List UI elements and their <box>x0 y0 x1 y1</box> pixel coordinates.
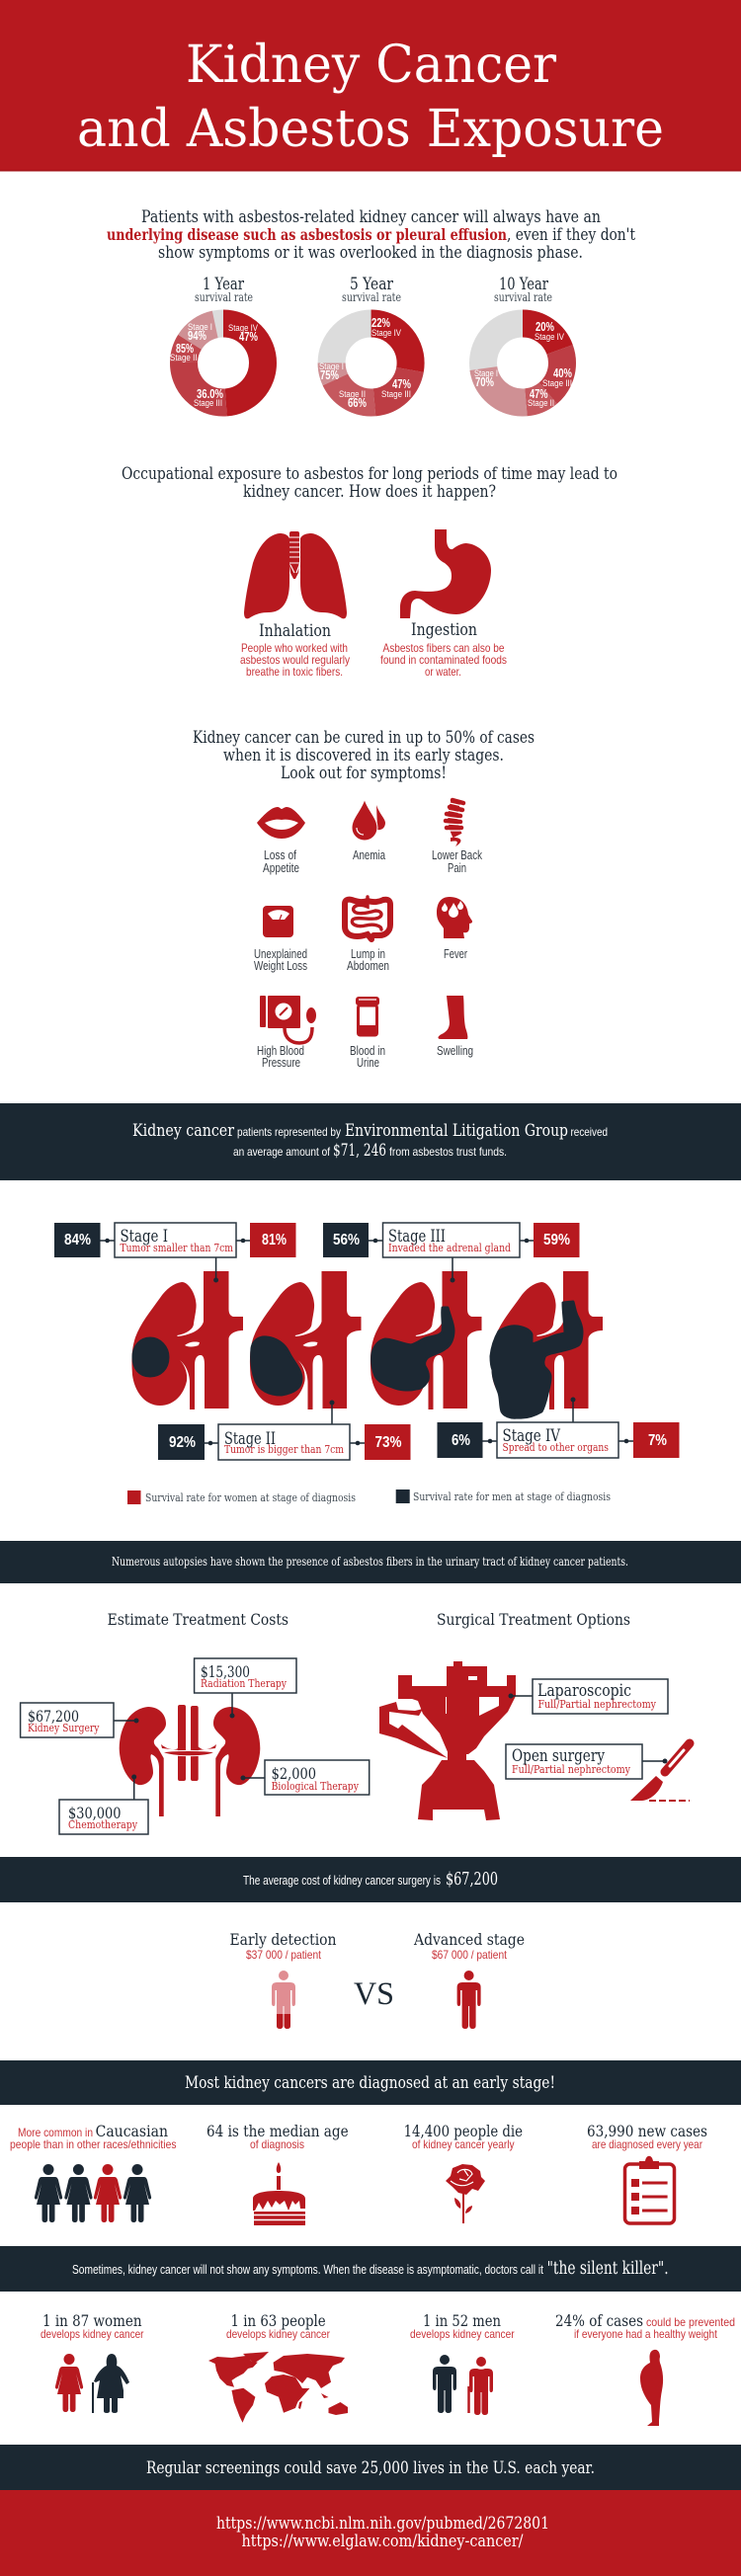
donut chart: 10 year survival: survival rate <box>494 290 552 304</box>
symptom labels: Lower Back <box>432 848 483 862</box>
donut chart: 10 year survival <box>474 275 572 409</box>
icon: swollen leg <box>438 996 467 1039</box>
donut chart: 1 year survival: 47% <box>239 330 258 344</box>
text block: inhalation <box>240 621 350 679</box>
callout: stage I: 81% <box>262 1232 287 1248</box>
callout: stage III: Invaded the adrenal gland <box>388 1242 511 1254</box>
text block: ingestion <box>380 620 507 679</box>
callout: stage II: 92% <box>169 1434 196 1451</box>
callout: open surgery: Open surgery <box>512 1746 605 1766</box>
stat: median age <box>206 2122 349 2225</box>
symptom labels: Anemia <box>353 848 385 862</box>
donut chart: 1 year survival: 36.0% <box>197 387 223 401</box>
icon: four women <box>35 2164 151 2222</box>
symptom labels: Pressure <box>262 1056 300 1070</box>
donut chart: 5 year survival: Stage III <box>381 389 411 400</box>
callout: stage II: 73% <box>375 1434 401 1451</box>
callout: biological therapy cost: Biological Therapy <box>272 1780 360 1793</box>
band: silent killer: "the silent killer". <box>547 2259 669 2279</box>
symptom labels: Unexplained <box>254 947 307 961</box>
intro text: show symptoms or it was overlooked in the diagnosis phase. <box>158 243 583 262</box>
donut chart: 5 year survival: survival rate <box>342 290 401 304</box>
icon: rose <box>446 2164 485 2223</box>
heading: symptoms: when it is discovered in its early stages. <box>223 746 504 765</box>
stat: new cases <box>587 2122 707 2223</box>
callout: biological therapy cost: $2,000 <box>272 1764 316 1783</box>
callout: radiation therapy cost: Radiation Therapy <box>201 1677 288 1690</box>
band: autopsies <box>0 1541 741 1583</box>
band: litigation group average: from asbestos trust funds. <box>389 1145 507 1159</box>
icon: birthday cake <box>253 2162 305 2225</box>
footer: sources: https://www.ncbi.nlm.nih.gov/pubmed/2672801 <box>216 2514 549 2533</box>
icon: kidneys and vessels <box>120 1705 260 1816</box>
band: regular screenings: Regular screenings could save 25,000 lives in the U.S. each year. <box>146 2458 595 2477</box>
donut chart: 5 year survival: 5 Year <box>350 275 394 294</box>
band: average surgery cost: $67,200 <box>446 1869 498 1890</box>
callout: stage III: 59% <box>543 1232 570 1248</box>
stat: median age: of diagnosis <box>250 2137 304 2151</box>
donut chart: 10 year survival: 47% <box>530 387 547 401</box>
text block: inhalation: breathe in toxic fibers. <box>246 665 343 679</box>
stat: 1 in 63 people: develops kidney cancer <box>226 2327 330 2341</box>
symptom labels: Appetite <box>263 861 299 875</box>
stat: 1 in 63 people: 1 in 63 people <box>231 2311 326 2330</box>
callout: biological therapy cost <box>241 1760 370 1795</box>
callout: open surgery: Full/Partial nephrectomy <box>512 1763 631 1776</box>
icon: blood pressure cuff <box>260 996 316 1043</box>
band: regular screenings <box>0 2445 741 2490</box>
stat: 1 in 52 men <box>410 2311 515 2415</box>
band: litigation group average <box>0 1103 741 1180</box>
stat: caucasian <box>10 2122 176 2222</box>
callout: laparoscopic: Laparoscopic <box>537 1681 631 1701</box>
icon: surgical robot <box>379 1661 516 1820</box>
band: silent killer: Sometimes, kidney cancer will not show any symptoms. When the disease is asymptomatic, doctors call it <box>72 2263 543 2277</box>
band: early stage diagnosis: Most kidney cancers are diagnosed at an early stage! <box>185 2073 555 2092</box>
heading: symptoms <box>193 728 535 782</box>
callout: stage III <box>323 1223 579 1282</box>
callout: stage I: 84% <box>64 1232 91 1248</box>
stat: preventable cases: if everyone had a healthy weight <box>574 2327 718 2341</box>
kidney stage III diagram <box>370 1271 482 1409</box>
callout: chemotherapy cost <box>59 1774 148 1834</box>
icon: intestines <box>345 897 390 939</box>
callout: radiation therapy cost: $15,300 <box>201 1662 250 1681</box>
callout: stage IV: Spread to other organs <box>502 1441 609 1454</box>
icon: head with fever drops <box>437 897 472 938</box>
icon: clipboard <box>624 2156 674 2223</box>
symptom labels <box>254 848 483 1070</box>
donut chart: 10 year survival: 10 Year <box>499 275 549 294</box>
icon: woman <box>55 2354 83 2412</box>
icon: man <box>433 2355 456 2413</box>
donut chart: 1 year survival: 85% <box>176 342 194 356</box>
donut chart: 1 year survival: Stage IV <box>228 323 259 334</box>
legend: women: Survival rate for women at stage of diagnosis <box>145 1490 356 1504</box>
stat: 1 in 87 women <box>41 2311 144 2413</box>
donut chart: 5 year survival: 47% <box>392 377 411 391</box>
text block: inhalation: asbestos would regularly <box>240 653 350 667</box>
callout: chemotherapy cost: Chemotherapy <box>68 1818 138 1831</box>
intro text: Patients with asbestos-related kidney cancer will always have an <box>141 207 601 226</box>
heading: symptoms: Kidney cancer can be cured in up to 50% of cases <box>193 728 535 747</box>
comparison: early detection: $37 000 / patient <box>246 1948 322 1962</box>
donut chart: 10 year survival: 40% <box>553 366 572 380</box>
stat: caucasian: people than in other races/ethnicities <box>10 2137 176 2151</box>
symptom labels: High Blood <box>257 1044 304 1058</box>
donut chart: 1 year survival: survival rate <box>195 290 253 304</box>
stat: 1 in 52 men: develops kidney cancer <box>410 2327 515 2341</box>
text: versus: VS <box>354 1976 394 2012</box>
intro text: , even if they don't <box>507 225 635 244</box>
band: early stage diagnosis <box>0 2060 741 2105</box>
title: Kidney Cancer <box>186 36 556 95</box>
callout: stage IV: Stage IV <box>502 1426 561 1446</box>
icon: spine <box>446 800 463 846</box>
donut chart: 5 year survival: 22% <box>371 316 390 330</box>
band: litigation group average: Kidney cancer <box>132 1121 234 1140</box>
band: litigation group average: $71, 246 <box>333 1141 386 1161</box>
text block: ingestion: found in contaminated foods <box>380 653 507 667</box>
donut chart: 10 year survival: Stage I <box>474 368 498 379</box>
icon: elderly man with cane <box>468 2357 493 2415</box>
donut chart: 10 year survival: 20% <box>535 320 554 334</box>
heading: surgical options: Surgical Treatment Options <box>437 1610 630 1629</box>
icon: stomach <box>400 529 491 618</box>
symptom labels: Blood in <box>350 1044 385 1058</box>
stat: 1 in 87 women: 1 in 87 women <box>42 2311 142 2330</box>
icon: lips <box>257 807 305 839</box>
donut chart: 1 year survival <box>170 275 263 409</box>
header banner <box>0 0 741 172</box>
callout: open surgery <box>506 1744 668 1779</box>
stat: preventable cases: 24% of cases <box>555 2311 643 2330</box>
stat: deaths: of kidney cancer yearly <box>412 2137 515 2151</box>
callout: stage I: Tumor smaller than 7cm <box>121 1242 233 1254</box>
stat: median age: 64 is the median age <box>206 2122 349 2140</box>
band: litigation group average: Environmental Litigation Group <box>345 1121 568 1140</box>
donut chart: 10 year survival: Stage II <box>528 398 554 409</box>
icon: urine sample jar <box>356 997 379 1036</box>
symptom labels: Weight Loss <box>254 959 307 973</box>
icon: scalpel <box>630 1743 690 1801</box>
comparison: early detection <box>229 1930 336 2029</box>
callout: laparoscopic: Full/Partial nephrectomy <box>537 1698 657 1711</box>
band: average surgery cost <box>0 1857 741 1902</box>
stat: 1 in 87 women: develops kidney cancer <box>41 2327 144 2341</box>
callout: stage IV: 6% <box>452 1432 470 1449</box>
donut chart: 5 year survival: Stage II <box>339 389 366 400</box>
callout: kidney surgery cost: Kidney Surgery <box>28 1722 100 1734</box>
heading: how exposure happens <box>122 464 618 501</box>
donut chart: 1 year survival: Stage III <box>194 398 222 409</box>
band: litigation group average: patients represented by <box>237 1125 341 1139</box>
legend: men: Survival rate for men at stage of diagnosis <box>413 1489 611 1503</box>
icon: elderly woman with cane <box>93 2354 129 2413</box>
icon: weight scale <box>263 906 293 937</box>
comparison: advanced stage: $67 000 / patient <box>432 1948 508 1962</box>
heading: how exposure happens: kidney cancer. How does it happen? <box>243 482 496 501</box>
callout: kidney surgery cost: $67,200 <box>28 1707 79 1726</box>
kidney stage I diagram <box>131 1271 243 1409</box>
donut chart: 10 year survival: 70% <box>475 375 494 389</box>
band: average surgery cost: The average cost of kidney cancer surgery is <box>243 1874 441 1888</box>
donut chart: 5 year survival: 75% <box>320 368 339 382</box>
icon: lungs <box>244 531 347 618</box>
stat: deaths <box>404 2122 523 2223</box>
footer: sources: https://www.elglaw.com/kidney-cancer/ <box>241 2532 524 2550</box>
donut chart: 5 year survival <box>319 275 411 410</box>
stat: caucasian: More common in <box>18 2126 93 2139</box>
title: and Asbestos Exposure <box>77 100 664 159</box>
stat: new cases: 63,990 new cases <box>587 2122 707 2140</box>
callout: stage II: Stage II <box>224 1429 276 1449</box>
stat: deaths: 14,400 people die <box>404 2122 523 2140</box>
heading: treatment costs: Estimate Treatment Costs <box>108 1610 288 1629</box>
donut chart: 10 year survival: Stage III <box>542 378 572 389</box>
stat: preventable cases <box>555 2311 735 2426</box>
icon: blood drops <box>352 799 385 841</box>
callout: stage IV <box>437 1397 680 1458</box>
donut chart: 5 year survival: 66% <box>348 396 367 410</box>
symptom labels: Urine <box>357 1056 379 1070</box>
text block: ingestion: or water. <box>425 665 461 679</box>
callout: stage III: 56% <box>333 1232 360 1248</box>
intro text <box>107 207 635 262</box>
callout: stage II <box>158 1401 411 1460</box>
donut chart: 1 year survival: Stage II <box>170 353 198 363</box>
text block: ingestion: Ingestion <box>411 620 477 640</box>
kidney stage IV diagram <box>491 1271 603 1417</box>
band: litigation group average: received <box>571 1125 608 1139</box>
donut chart: 1 year survival: Stage I <box>188 322 212 333</box>
comparison: advanced stage: Advanced stage <box>413 1930 525 1949</box>
band: silent killer <box>0 2246 741 2292</box>
kidney stage II diagram <box>250 1271 362 1409</box>
callout: stage IV: 7% <box>648 1432 667 1449</box>
donut chart: 1 year survival: 1 Year <box>203 275 245 294</box>
title <box>77 36 664 159</box>
callout: chemotherapy cost: $30,000 <box>68 1804 121 1822</box>
callout: stage III: Stage III <box>388 1227 446 1247</box>
comparison: early detection: Early detection <box>229 1930 336 1949</box>
heading: how exposure happens: Occupational exposure to asbestos for long periods of time may lead to <box>122 464 618 483</box>
symptom labels: Loss of <box>264 848 296 862</box>
symptom labels: Fever <box>444 947 467 961</box>
comparison: advanced stage <box>413 1930 525 2029</box>
donut chart: 10 year survival: Stage IV <box>535 332 565 343</box>
text block: ingestion: Asbestos fibers can also be <box>383 641 505 655</box>
text block: inhalation: Inhalation <box>259 621 331 641</box>
symptom labels: Lump in <box>351 947 385 961</box>
callout: radiation therapy cost <box>195 1658 296 1719</box>
callout: laparoscopic <box>508 1679 668 1714</box>
text block: inhalation: People who worked with <box>241 641 348 655</box>
stat: new cases: are diagnosed every year <box>592 2137 702 2151</box>
donut chart: 5 year survival: Stage IV <box>371 328 402 339</box>
footer: sources <box>0 2490 741 2576</box>
stat: 1 in 63 people <box>208 2311 348 2423</box>
icon: overweight person <box>640 2350 663 2426</box>
stat: 1 in 52 men: 1 in 52 men <box>423 2311 501 2330</box>
heading: symptoms: Look out for symptoms! <box>281 764 447 782</box>
callout: kidney surgery cost <box>21 1703 139 1737</box>
symptom labels: Swelling <box>437 1044 473 1058</box>
donut chart: 1 year survival: 94% <box>188 329 206 343</box>
stat: caucasian: Caucasian <box>96 2122 168 2140</box>
symptom labels: Pain <box>448 861 466 875</box>
icon: world map <box>208 2352 348 2423</box>
intro text: underlying disease such as asbestosis or pleural effusion <box>107 225 507 244</box>
donut chart: 5 year survival: Stage I <box>319 362 344 372</box>
callout: stage I: Stage I <box>121 1227 168 1247</box>
callout: stage II: Tumor is bigger than 7cm <box>224 1443 344 1456</box>
band: litigation group average: an average amount of <box>233 1145 331 1159</box>
callout: stage I <box>54 1223 296 1282</box>
symptom labels: Abdomen <box>347 959 389 973</box>
